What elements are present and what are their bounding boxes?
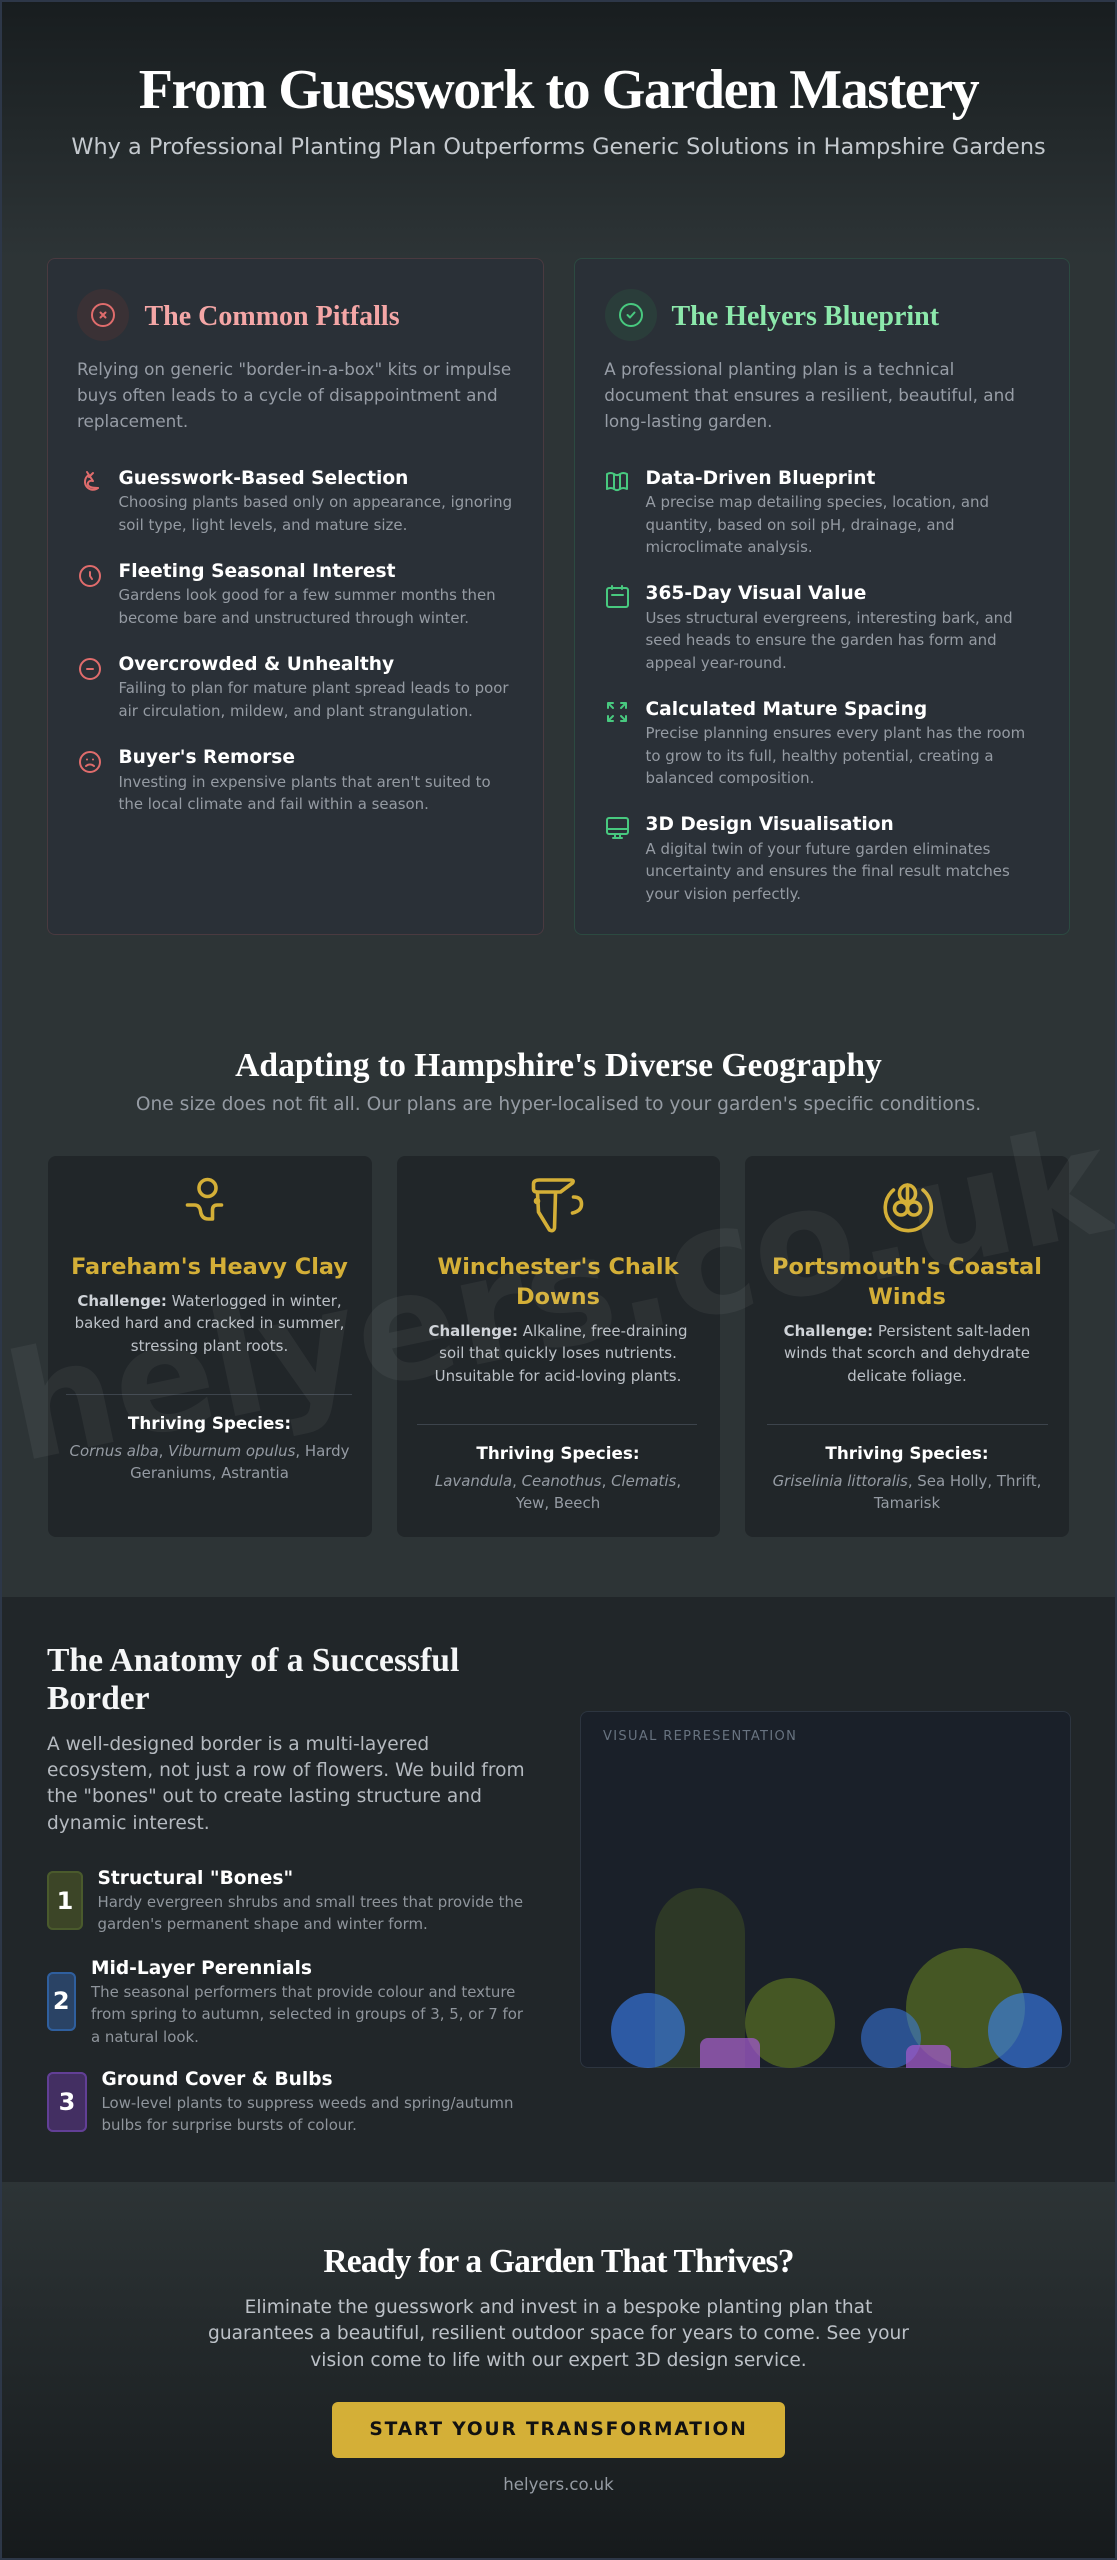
- icon: check in circle: [605, 289, 657, 341]
- challenge text: stressing plant roots.: [131, 1337, 288, 1355]
- icon: leaf swirl: [84, 471, 99, 491]
- item description: Gardens look good for a few summer months then: [118, 586, 496, 604]
- layer 3: ground cover and bulbs: [0, 2066, 1117, 2068]
- icon: calendar: [606, 585, 629, 608]
- shape: blue perennial small: [861, 2008, 921, 2068]
- intro text: document that ensures a resilient, beautiful, and: [604, 385, 1015, 405]
- watermark: helyers.co.uk: [0, 1094, 1117, 1496]
- icon: spacing arrows: [607, 702, 627, 722]
- item description: [646, 493, 989, 556]
- pitfall: overcrowded and unhealthy: [79, 654, 508, 720]
- item title: 3D Design Visualisation: [646, 814, 894, 835]
- anatomy intro text: dynamic interest.: [47, 1813, 210, 1834]
- panel: winchester: [396, 1156, 720, 1537]
- item description: A digital twin of your future garden eliminates: [646, 840, 990, 858]
- shape: blue perennial right: [988, 1993, 1062, 2068]
- heading: geography section: Adapting to Hampshire's Diverse Geography: [235, 1047, 882, 1084]
- region title: [438, 1254, 679, 1310]
- item description: Choosing plants based only on appearance, ignoring: [118, 493, 512, 511]
- heading: anatomy: Border: [47, 1680, 150, 1716]
- item description: soil type, light levels, and mature size.: [118, 516, 407, 534]
- challenge text: delicate foliage.: [847, 1367, 967, 1385]
- item title: 365-Day Visual Value: [646, 583, 866, 604]
- panel: the helyers blueprint: [574, 258, 1070, 935]
- shape: olive shrub right: [906, 1948, 1024, 2068]
- heading: the helyers blueprint: The Helyers Blueprint: [672, 301, 939, 332]
- pitfall: fleeting seasonal interest: [79, 561, 496, 627]
- anatomy intro text: [47, 1734, 525, 1834]
- item description: uncertainty and ensures the final result matches: [646, 862, 1010, 880]
- icon: monitor: [606, 817, 629, 839]
- thriving species label: Thriving Species:: [128, 1413, 291, 1433]
- header: [71, 59, 1046, 160]
- item description: balanced composition.: [646, 769, 814, 787]
- intro text: buys often leads to a cycle of disappointment and: [77, 385, 498, 405]
- species list: [70, 1442, 349, 1482]
- species list: Tamarisk: [874, 1494, 940, 1512]
- shape: purple ground cover right: [906, 2045, 950, 2068]
- layer description: bulbs for surprise bursts of colour.: [102, 2116, 357, 2134]
- region title: Portsmouth's Coastal: [772, 1254, 1042, 1280]
- species list: [435, 1472, 681, 1512]
- anatomy intro text: A well-designed border is a multi-layered: [47, 1734, 429, 1755]
- item description: [118, 679, 508, 720]
- challenge text: Challenge: Waterlogged in winter,: [77, 1292, 342, 1310]
- heading: anatomy: The Anatomy of a Successful: [47, 1642, 459, 1679]
- challenge text: Challenge: Alkaline, free-draining: [429, 1322, 687, 1340]
- heading: the common pitfalls: The Common Pitfalls: [144, 301, 400, 332]
- icon: minus circle: [79, 658, 101, 680]
- challenge text: [429, 1322, 687, 1385]
- layer 2: mid-layer perennials: [0, 1955, 1117, 1957]
- pitfall: guesswork-based selection: [84, 468, 512, 534]
- item description: the local climate and fail within a season.: [118, 795, 429, 813]
- layer description: [98, 1891, 523, 1936]
- species list: [773, 1472, 1041, 1512]
- panel: the common pitfalls: [47, 258, 544, 935]
- region title: Downs: [516, 1284, 600, 1310]
- item title: Calculated Mature Spacing: [646, 699, 927, 720]
- pitfall: buyer's remorse: [79, 747, 491, 813]
- icon: clock: [79, 565, 101, 587]
- item description: [646, 840, 1010, 903]
- item description: A precise map detailing species, location, and: [646, 493, 989, 511]
- challenge text: baked hard and cracked in summer,: [75, 1314, 344, 1332]
- icon: map: [606, 472, 628, 492]
- layer description: garden's permanent shape and winter form.: [98, 1915, 428, 1933]
- challenge text: Challenge: Persistent salt-laden: [784, 1322, 1030, 1340]
- challenge text: soil that quickly loses nutrients.: [439, 1344, 677, 1362]
- badge 2: 2: [53, 1987, 70, 2015]
- layer 1: structural bones: [0, 1865, 1117, 1867]
- cta text: [0, 2294, 1117, 2374]
- layer title: Mid-Layer Perennials: [91, 1958, 312, 1979]
- shape: blue perennial left: [611, 1993, 685, 2068]
- region title: Winds: [868, 1284, 946, 1310]
- item description: [118, 773, 491, 813]
- item description: [646, 724, 1025, 787]
- item title: Buyer's Remorse: [118, 747, 295, 768]
- item description: [118, 493, 512, 534]
- badge 3: 3: [59, 2088, 75, 2116]
- intro text: [77, 359, 511, 431]
- shape: tall evergreen: [655, 1888, 745, 2068]
- challenge text: [75, 1292, 344, 1355]
- intro text: Relying on generic "border-in-a-box" kits or impulse: [77, 359, 511, 379]
- item description: microclimate analysis.: [646, 538, 813, 556]
- badge 1: 1: [57, 1886, 73, 1914]
- layer description: [102, 2092, 513, 2137]
- item title: Fleeting Seasonal Interest: [118, 561, 396, 582]
- layer description: Low-level plants to suppress weeds and spring/autumn: [102, 2094, 513, 2112]
- icon: fareham clay: [186, 1178, 224, 1221]
- background: header gradient: [0, 0, 1117, 258]
- item description: become bare and unstructured through winter.: [118, 609, 469, 627]
- website: helyers.co.uk: [503, 2475, 614, 2494]
- title: From Guesswork to Garden Mastery: [139, 59, 978, 121]
- intro text: [604, 359, 1015, 431]
- cta button: START YOUR TRANSFORMATION: [369, 2418, 748, 2440]
- icon: x in circle: [77, 289, 129, 341]
- item title: Overcrowded & Unhealthy: [118, 654, 394, 675]
- item description: Uses structural evergreens, interesting bark, and: [646, 609, 1013, 627]
- layer description: [91, 1981, 523, 2048]
- region title: Winchester's Chalk: [438, 1254, 678, 1280]
- benefit: 365-day visual value: [606, 583, 1013, 672]
- icon: sad face: [79, 751, 101, 773]
- badge 2: [47, 1972, 76, 2031]
- panel: anatomy of a successful border: [0, 1597, 1117, 2182]
- species list: Griselinia littoralis, Sea Holly, Thrift,: [773, 1472, 1041, 1490]
- item description: quantity, based on soil pH, drainage, and: [646, 516, 954, 534]
- layer description: a natural look.: [91, 2028, 199, 2046]
- benefit: 3d design visualisation: [606, 814, 1010, 903]
- item description: Failing to plan for mature plant spread leads to poor: [118, 679, 508, 697]
- item description: seed heads to ensure the garden has form and: [646, 631, 997, 649]
- item description: to grow to its full, healthy potential, creating a: [646, 747, 994, 765]
- intro text: replacement.: [77, 411, 188, 431]
- layer description: Hardy evergreen shrubs and small trees that provide the: [98, 1893, 523, 1911]
- cta text: Eliminate the guesswork and invest in a bespoke planting plan that: [245, 2296, 872, 2318]
- badge 3: [47, 2072, 87, 2132]
- panel: portsmouth: [745, 1156, 1069, 1537]
- thriving species label: Thriving Species:: [825, 1443, 989, 1463]
- layer description: from spring to autumn, selected in groups of 3, 5, or 7 for: [91, 2005, 523, 2023]
- cta button: [332, 2402, 785, 2458]
- badge 1: [47, 1871, 83, 1930]
- layer description: The seasonal performers that provide colour and texture: [91, 1983, 515, 2001]
- challenge text: winds that scorch and dehydrate: [784, 1344, 1030, 1362]
- challenge text: Unsuitable for acid-loving plants.: [435, 1367, 681, 1385]
- cta heading: Ready for a Garden That Thrives?: [323, 2242, 794, 2280]
- species list: Geraniums, Astrantia: [130, 1464, 289, 1482]
- cta text: guarantees a beautiful, resilient outdoor space for years to come. See your: [208, 2323, 909, 2344]
- challenge text: [784, 1322, 1030, 1385]
- panel: fareham: [48, 1156, 372, 1537]
- visual label: VISUAL REPRESENTATION: [603, 1728, 797, 1744]
- benefit: data-driven blueprint: [606, 468, 989, 556]
- panel: visual representation: [580, 1710, 1070, 2068]
- cta text: vision come to life with our expert 3D design service.: [310, 2350, 807, 2370]
- icon: winchester chalk: [532, 1178, 584, 1232]
- layer title: Ground Cover & Bulbs: [102, 2069, 333, 2090]
- item description: Investing in expensive plants that aren't suited to: [118, 773, 491, 791]
- panel: call to action: [0, 2182, 1117, 2560]
- subtitle: Why a Professional Planting Plan Outperforms Generic Solutions in Hampshire Gardens: [71, 134, 1046, 160]
- item description: appeal year-round.: [646, 654, 787, 672]
- region title: Fareham's Heavy Clay: [71, 1254, 348, 1280]
- intro text: A professional planting plan is a technical: [604, 359, 954, 379]
- intro text: long-lasting garden.: [604, 411, 772, 431]
- heading: anatomy: [47, 1642, 459, 1716]
- species list: Cornus alba, Viburnum opulus, Hardy: [70, 1442, 349, 1460]
- species list: Lavandula, Ceanothus, Clematis,: [435, 1472, 681, 1490]
- region title: [772, 1254, 1042, 1310]
- thriving species label: Thriving Species:: [476, 1443, 640, 1463]
- item description: [646, 609, 1013, 672]
- benefit: calculated mature spacing: [607, 699, 1025, 787]
- shape: olive shrub left: [744, 1978, 834, 2068]
- shape: purple ground cover left: [700, 2038, 760, 2068]
- layer title: Structural "Bones": [98, 1868, 293, 1889]
- subheading: geography section: One size does not fit all. Our plans are hyper-localised to your garden's specific conditions.: [136, 1094, 981, 1114]
- item description: your vision perfectly.: [646, 885, 801, 903]
- anatomy intro text: ecosystem, not just a row of flowers. We build from: [47, 1760, 525, 1781]
- item description: air circulation, mildew, and plant strangulation.: [118, 702, 473, 720]
- icon: portsmouth wind: [883, 1183, 934, 1232]
- item description: Precise planning ensures every plant has the room: [646, 724, 1025, 742]
- item title: Guesswork-Based Selection: [118, 468, 408, 489]
- species list: Yew, Beech: [516, 1494, 600, 1512]
- item description: [118, 586, 496, 627]
- anatomy intro text: the "bones" out to create lasting structure and: [47, 1786, 482, 1807]
- item title: Data-Driven Blueprint: [646, 468, 875, 489]
